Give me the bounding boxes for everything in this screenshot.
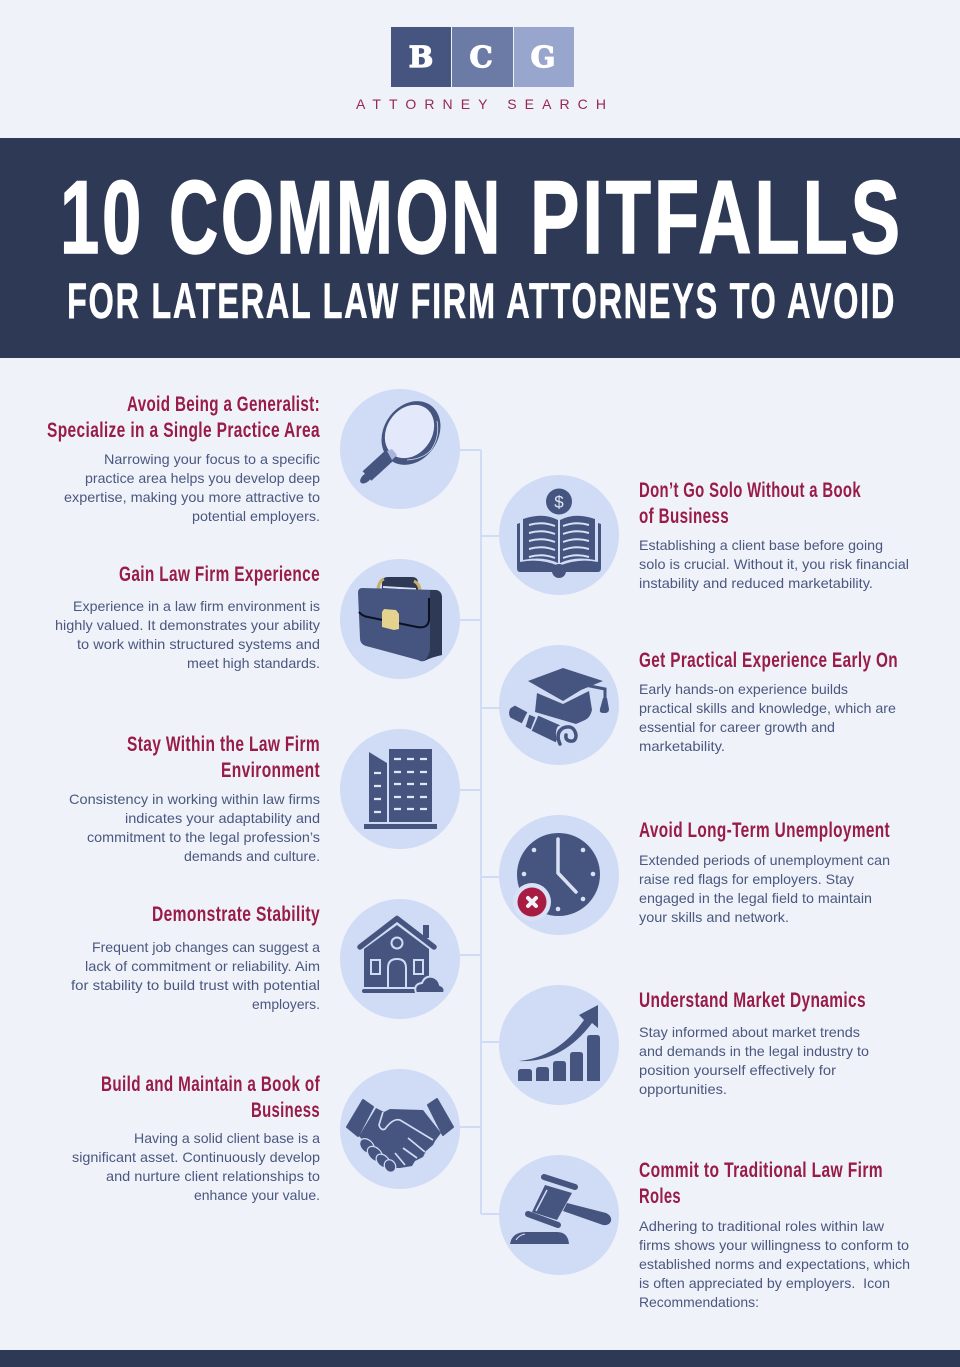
icon: magnifying glass [340, 389, 460, 509]
icon: book with dollar: $ [554, 492, 564, 512]
pitfall 6 text: solo is crucial. Without it, you risk financial [639, 556, 909, 572]
icon: briefcase [340, 559, 460, 679]
pitfall 10 text: Commit to Traditional Law Firm [639, 1159, 883, 1182]
pitfall 10 text: firms shows your willingness to conform to [639, 1237, 909, 1253]
pitfall 1 text: practice area helps you develop deep [85, 470, 320, 486]
pitfall 3 text: Consistency in working within law firms [69, 791, 320, 807]
logo [356, 27, 606, 112]
pitfall 1 text: Specialize in a Single Practice Area [47, 419, 320, 442]
pitfall 4 text: Demonstrate Stability [152, 903, 320, 926]
timeline connector [458, 450, 501, 1214]
pitfall 3 text [69, 733, 320, 864]
icon: handshake [340, 1069, 460, 1189]
pitfall 7 text [639, 649, 898, 754]
title banner: COMMON [169, 160, 503, 276]
pitfall 9 text: Stay informed about market trends [639, 1024, 860, 1040]
pitfall 6 text: Establishing a client base before going [639, 537, 883, 553]
bottom bar [0, 1350, 960, 1367]
pitfall 5 text [72, 1073, 320, 1203]
pitfall 8 text: engaged in the legal field to maintain [639, 890, 872, 906]
pitfall 2 text: highly valued. It demonstrates your ability [55, 617, 320, 633]
pitfall 3 text: Stay Within the Law Firm [127, 733, 320, 756]
pitfall 6 text: of Business [639, 505, 729, 528]
pitfall 9 text: opportunities. [639, 1081, 727, 1097]
pitfall 1 text [47, 393, 320, 524]
pitfall 10 text [639, 1159, 910, 1310]
icon: growth chart [499, 985, 619, 1105]
icon: gavel [499, 1155, 619, 1275]
pitfall 8 text: raise red flags for employers. Stay [639, 871, 854, 887]
pitfall 10 text: is often appreciated by employers. Icon [639, 1275, 890, 1291]
pitfall 5 text: significant asset. Continuously develop [72, 1149, 320, 1165]
icon: clock with red cross [499, 815, 619, 935]
pitfall 10 text: established norms and expectations, which [639, 1256, 910, 1272]
pitfall 9 text [639, 989, 869, 1097]
pitfall 2 text: meet high standards. [187, 655, 320, 671]
pitfall 6 text [639, 479, 909, 591]
pitfall 3 text: demands and culture. [184, 848, 320, 864]
pitfall 5 text: and nurture client relationships to [106, 1168, 320, 1184]
pitfall 2 text: to work within structured systems and [77, 636, 320, 652]
pitfall 10 text: Recommendations: [639, 1294, 759, 1310]
pitfall 1 text: Avoid Being a Generalist: [127, 393, 320, 416]
pitfall 7 text: essential for career growth and [639, 719, 835, 735]
pitfall 4 text [71, 903, 320, 1012]
icon: office building [340, 729, 460, 849]
pitfall 10 text: Adhering to traditional roles within law [639, 1218, 885, 1234]
pitfall 1 text: potential employers. [192, 508, 320, 524]
pitfall 3 text: commitment to the legal profession’s [87, 829, 320, 845]
title banner [0, 138, 960, 358]
pitfall 4 text: Frequent job changes can suggest a [92, 939, 320, 955]
logo: ATTORNEY SEARCH [356, 96, 606, 112]
pitfall 3 text: indicates your adaptability and [125, 810, 320, 826]
pitfall 5 text: enhance your value. [194, 1187, 320, 1203]
icon: book with dollar [499, 475, 619, 595]
pitfall 2 text: Gain Law Firm Experience [119, 563, 320, 586]
pitfall 3 text: Environment [221, 759, 320, 782]
pitfall 9 text: Understand Market Dynamics [639, 989, 866, 1012]
pitfall 4 text: for stability to build trust with potential [71, 977, 320, 993]
icon: house [340, 899, 460, 1019]
pitfall 9 text: and demands in the legal industry to [639, 1043, 869, 1059]
pitfall 5 text: Having a solid client base is a [134, 1130, 320, 1146]
pitfall 7 text: practical skills and knowledge, which are [639, 700, 896, 716]
pitfall 2 text: Experience in a law firm environment is [73, 598, 320, 614]
logo: B [409, 40, 433, 74]
pitfall 5 text: Business [251, 1099, 320, 1122]
pitfall 7 text: marketability. [639, 738, 725, 754]
title banner: 10 [60, 160, 144, 276]
pitfall 8 text: Extended periods of unemployment can [639, 852, 890, 868]
pitfall 10 text: Roles [639, 1185, 681, 1208]
pitfall 7 text: Early hands-on experience builds [639, 681, 848, 697]
pitfall 8 text [639, 819, 890, 925]
pitfall 9 text: position yourself effectively for [639, 1062, 836, 1078]
pitfall 2 text [55, 563, 320, 671]
icon: graduation cap and diploma [499, 645, 619, 765]
pitfall 1 text: expertise, making you more attractive to [64, 489, 320, 505]
pitfall 6 text: Don’t Go Solo Without a Book [639, 479, 861, 502]
pitfall 5 text: Build and Maintain a Book of [101, 1073, 320, 1096]
logo: G [531, 40, 555, 74]
pitfall 6 text: instability and reduced marketability. [639, 575, 873, 591]
pitfall 8 text: your skills and network. [639, 909, 789, 925]
pitfall 4 text: employers. [252, 996, 320, 1012]
logo: C [469, 40, 493, 74]
pitfall 1 text: Narrowing your focus to a specific [104, 451, 320, 467]
pitfall 4 text: lack of commitment or reliability. Aim [85, 958, 320, 974]
